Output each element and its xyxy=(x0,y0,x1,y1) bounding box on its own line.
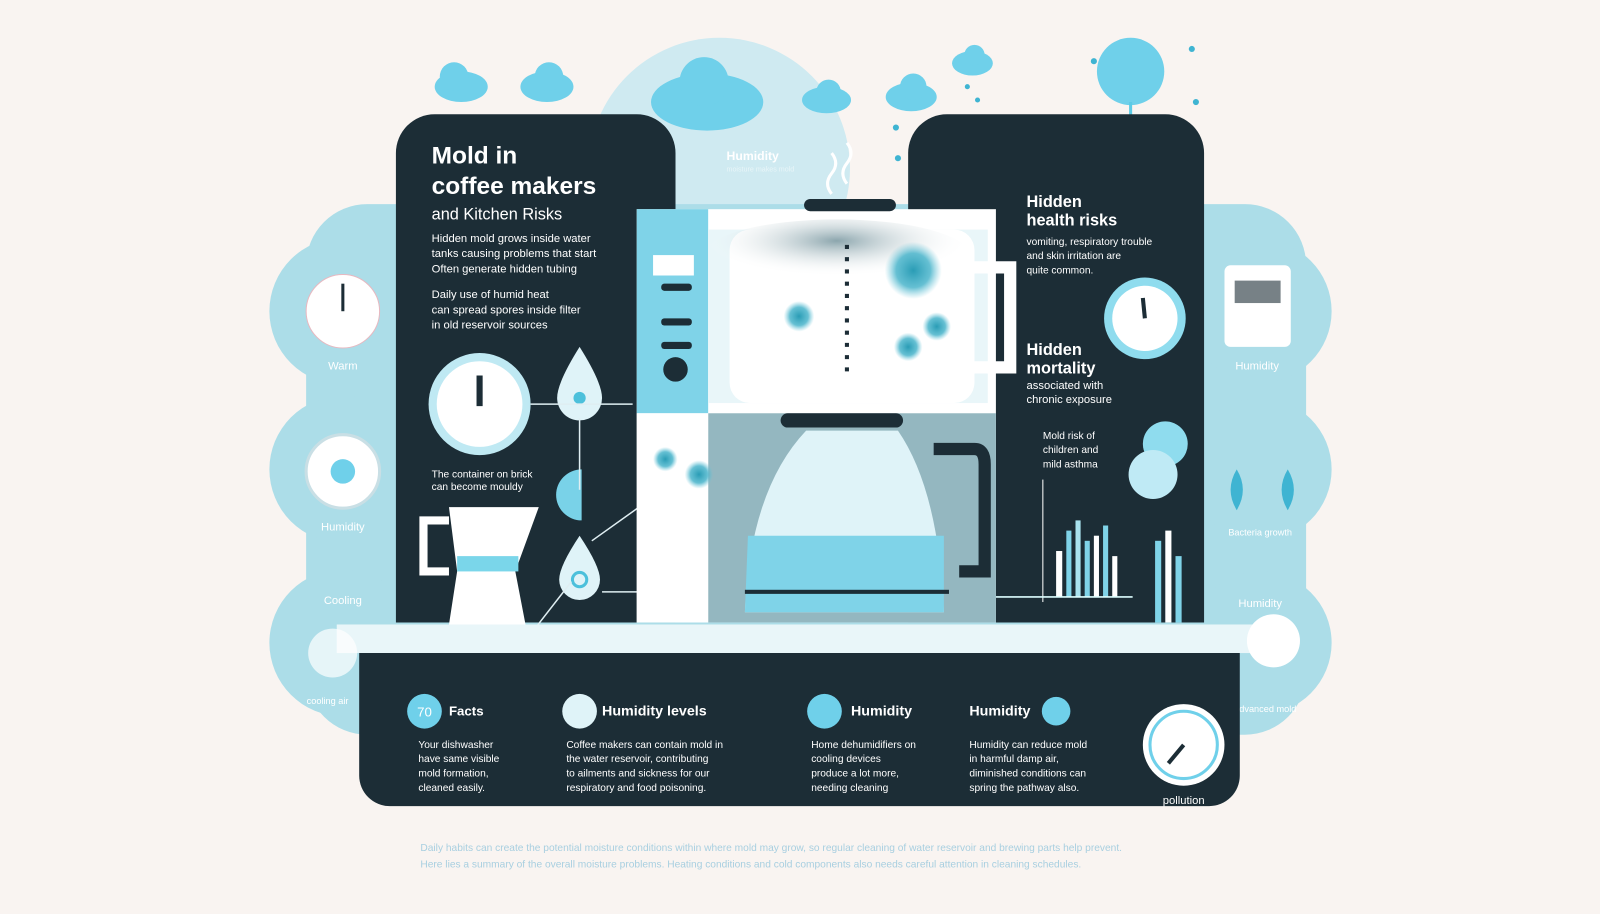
heading: hidden mortality: associated with xyxy=(1027,380,1103,392)
fact 1: have same visible xyxy=(418,754,500,765)
side labels right xyxy=(1224,265,1300,714)
arrows xyxy=(531,404,735,628)
fact 4: Humidity xyxy=(969,703,1030,719)
panel: bottom facts xyxy=(359,653,1240,807)
side labels right: Bacteria growth xyxy=(1228,528,1292,538)
footer text xyxy=(420,843,1122,870)
text: small note: The container on brick xyxy=(432,470,533,481)
fact 1: cleaned easily. xyxy=(418,783,485,794)
side labels left: cooling air xyxy=(307,696,348,706)
icon: drop 2 xyxy=(559,536,600,600)
intro text: Daily use of humid heat xyxy=(432,289,550,301)
side labels right: Humidity xyxy=(1238,598,1282,610)
text: small: Mold risk of xyxy=(1043,431,1095,442)
fact 3: cooling devices xyxy=(811,754,881,765)
fact 2: Coffee makers can contain mold in xyxy=(566,740,723,751)
background blob xyxy=(269,38,1332,735)
fact 2: the water reservoir, contributing xyxy=(566,754,709,765)
icon: clock xyxy=(429,353,531,455)
fact 1: 70 xyxy=(417,704,432,719)
rain drops xyxy=(893,46,1199,179)
panel: right risks: and skin irritation are xyxy=(1027,251,1121,262)
fact 3 xyxy=(807,694,916,794)
text: small note xyxy=(432,470,533,493)
fact 1 xyxy=(407,694,500,794)
icon: flowers xyxy=(1129,421,1188,499)
icon: half circle gauge xyxy=(556,469,582,520)
fact 2: to ailments and sickness for our xyxy=(566,769,710,780)
side labels left: Humidity xyxy=(321,522,365,534)
fact 3: Home dehumidifiers on xyxy=(811,740,916,751)
intro text: Often generate hidden tubing xyxy=(432,263,577,275)
footer text: Daily habits can create the potential moisture conditions within where mold may grow, so regular cleaning of water reservoir and brewing parts help prevent. xyxy=(420,843,1122,854)
heading: hidden health risks: Hidden xyxy=(1027,193,1082,211)
fact 1: Facts xyxy=(449,703,484,718)
fact 1: Your dishwasher xyxy=(418,740,494,751)
text: small xyxy=(1043,431,1099,470)
text: small note: can become mouldy xyxy=(432,482,524,493)
heading: hidden mortality: chronic exposure xyxy=(1027,394,1112,406)
side labels left: Warm xyxy=(328,360,358,372)
side labels left: Cooling xyxy=(324,595,362,607)
heading: hidden mortality: Hidden xyxy=(1027,341,1082,359)
icon: gauge: pollution xyxy=(1163,795,1205,807)
intro text: tanks causing problems that start xyxy=(432,248,597,260)
panel: left intro: and Kitchen Risks xyxy=(432,205,562,223)
panel: left intro: coffee makers xyxy=(432,173,596,200)
text: humidity label xyxy=(727,149,794,173)
panel: right risks: health risks xyxy=(1027,212,1117,230)
heading: hidden mortality: mortality xyxy=(1027,359,1095,377)
fact 1: mold formation, xyxy=(418,769,489,780)
icon: gauge xyxy=(1143,704,1224,807)
side labels right: advanced mold xyxy=(1234,704,1296,714)
fact 4 xyxy=(969,697,1087,794)
fact 3: produce a lot more, xyxy=(811,769,899,780)
bar chart xyxy=(959,480,1182,622)
fact 4: spring the pathway also. xyxy=(969,783,1079,794)
intro text: in old reservoir sources xyxy=(432,320,548,332)
fact 3: needing cleaning xyxy=(811,783,889,794)
clouds xyxy=(435,38,1164,131)
fact 2: Humidity levels xyxy=(602,703,707,719)
icon: pitcher xyxy=(423,507,539,624)
fact 4: in harmful damp air, xyxy=(969,754,1059,765)
fact 2 xyxy=(562,694,723,794)
fact 3: Humidity xyxy=(851,703,912,719)
footer text: Here lies a summary of the overall moisture problems. Heating conditions and cold components also needs careful attention in cleaning schedules. xyxy=(420,859,1081,870)
steam xyxy=(828,143,851,194)
text: humidity label: moisture makes mold xyxy=(727,165,794,173)
panel: right risks: vomiting, respiratory trouble xyxy=(1027,237,1153,248)
text: small: children and xyxy=(1043,445,1099,456)
panel: right risks xyxy=(908,114,1204,622)
title: Mold in xyxy=(432,142,517,169)
fact 4: Humidity can reduce mold xyxy=(969,740,1087,751)
icon: snowflake globe xyxy=(1102,102,1163,179)
intro text xyxy=(432,233,597,332)
panel: left intro xyxy=(396,114,735,628)
text: humidity label: Humidity xyxy=(727,149,779,163)
fact 4: diminished conditions can xyxy=(969,769,1086,780)
icon: clock right xyxy=(1104,278,1186,359)
fact 2: respiratory and food poisoning. xyxy=(566,783,706,794)
side labels left xyxy=(306,274,380,706)
intro text: Hidden mold grows inside water xyxy=(432,233,591,245)
panel: right risks: quite common. xyxy=(1027,265,1093,276)
text: small: mild asthma xyxy=(1043,459,1098,470)
side labels right: Humidity xyxy=(1235,360,1279,372)
coffee maker xyxy=(637,199,1010,622)
intro text: can spread spores inside filter xyxy=(432,304,581,316)
icon: drop xyxy=(557,347,602,420)
heading: hidden mortality xyxy=(1027,341,1112,406)
shelf xyxy=(337,624,1267,653)
